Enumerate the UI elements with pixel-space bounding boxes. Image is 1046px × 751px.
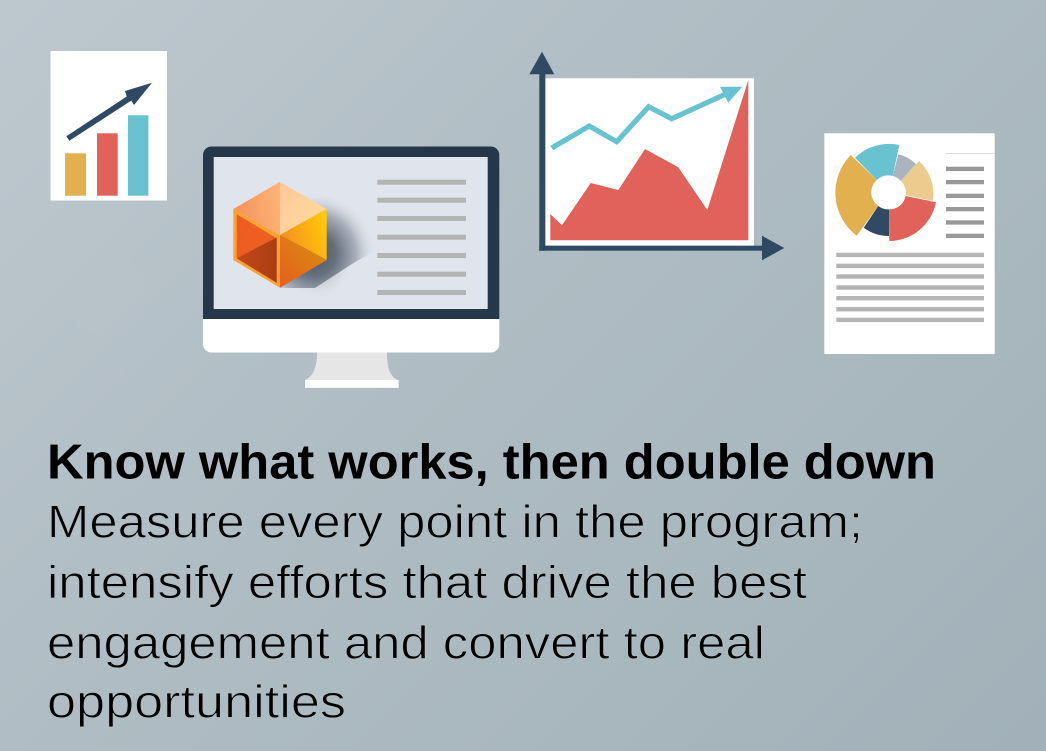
pie chart: [835, 144, 936, 241]
faint background circle: [64, 253, 148, 337]
monitor screen: [214, 157, 488, 309]
icon: orange cube: [233, 182, 327, 288]
red area series: [550, 80, 748, 240]
teal trend arrow: [552, 87, 742, 148]
report document with pie chart: [824, 133, 995, 354]
gold bar: [65, 153, 86, 196]
chart paper: [545, 78, 754, 246]
body text: intensify efforts that drive the best: [47, 556, 807, 608]
body text: [47, 495, 863, 728]
line and area chart: [529, 52, 784, 260]
body text: engagement and convert to real: [47, 616, 765, 668]
stand base: [305, 380, 399, 388]
title: Know what works, then double down: [47, 435, 936, 489]
body text: opportunities: [47, 676, 346, 728]
monitor bezel: [203, 146, 499, 319]
red bar: [97, 133, 118, 196]
cube shadow: [280, 185, 385, 300]
side text lines: [946, 167, 984, 238]
monitor stand: [305, 352, 398, 388]
header rule: [946, 152, 995, 155]
screen text lines: [377, 180, 466, 295]
body text: Measure every point in the program;: [47, 495, 863, 547]
body text lines: [836, 253, 984, 322]
teal bar: [128, 115, 148, 196]
icon: desktop monitor: [203, 146, 499, 388]
monitor chin: [203, 318, 499, 352]
icon: bar chart card: [50, 51, 167, 200]
chart axes: [529, 52, 784, 260]
growth arrow: [66, 83, 152, 141]
document page: [824, 133, 995, 354]
